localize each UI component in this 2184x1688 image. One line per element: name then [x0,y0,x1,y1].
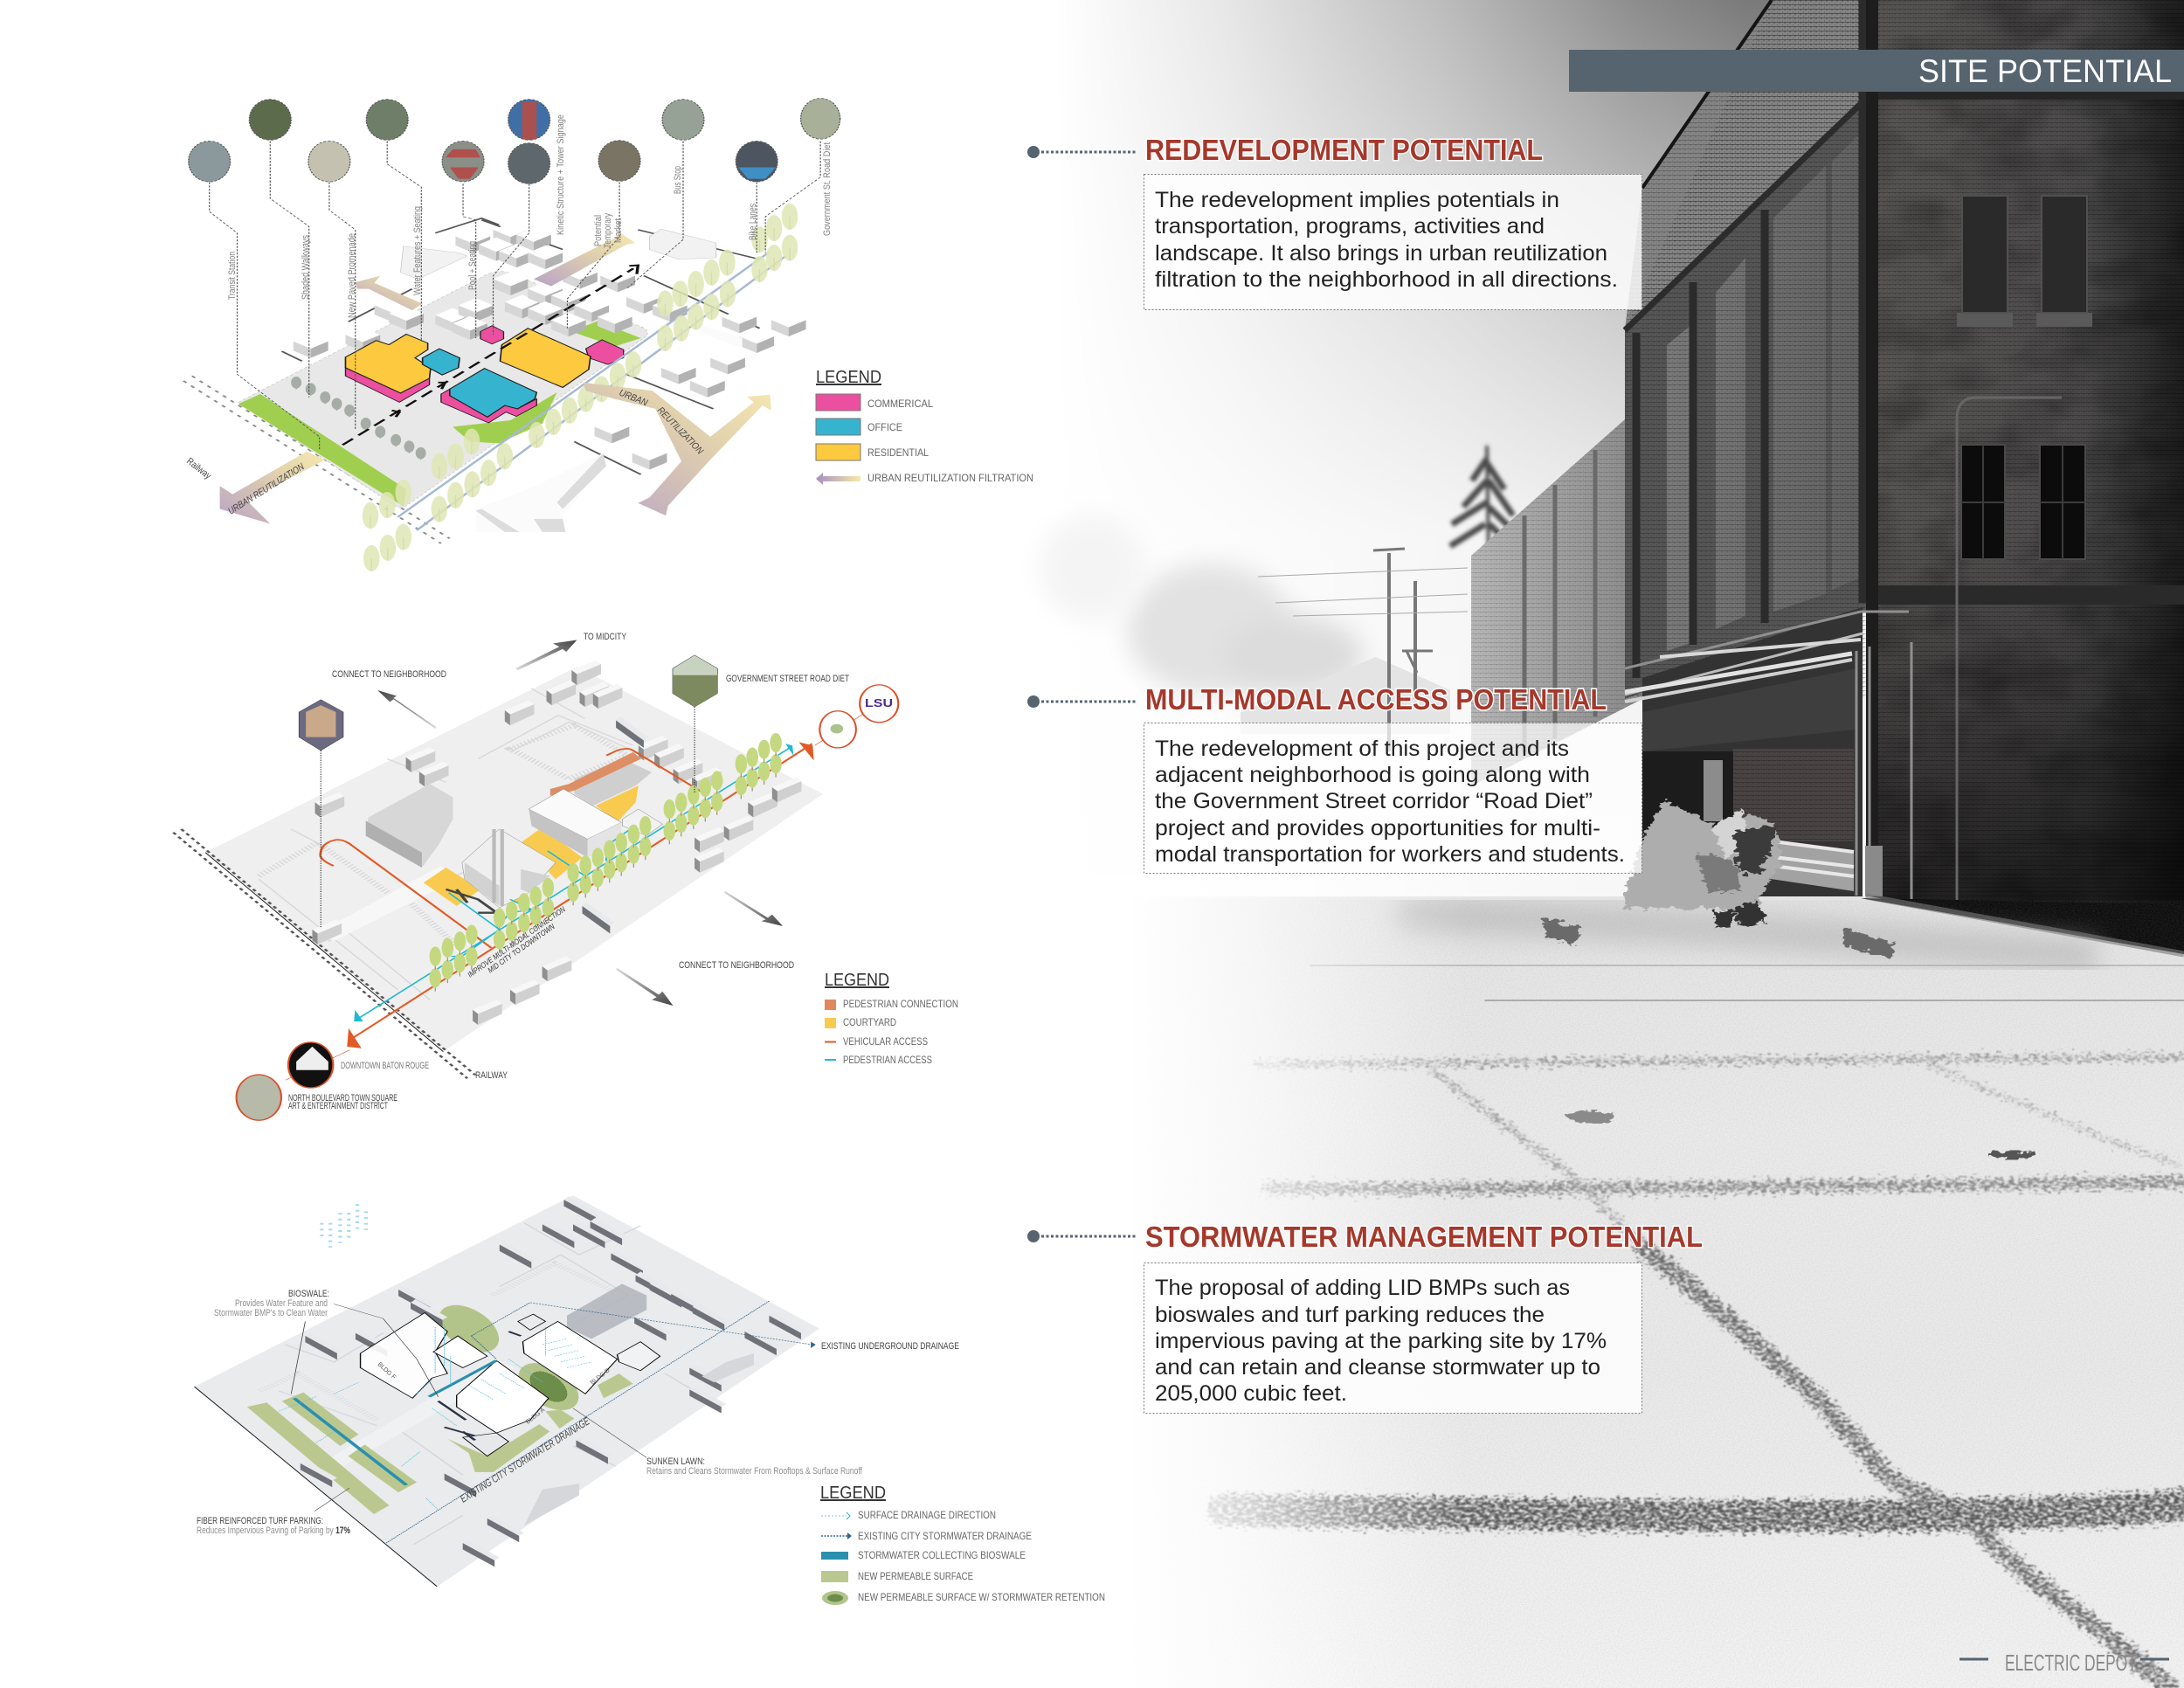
street trees [430,733,782,992]
retention lawns [427,1301,591,1414]
legend 2: PEDESTRIAN ACCESS [843,1054,932,1066]
diagram labels: Stormwater BMP's to Clean Water [214,1308,328,1318]
connector dot [1027,695,1137,708]
leaders [321,707,695,928]
text box [1144,723,1642,874]
diagram labels: BIOSWALE: [288,1289,329,1299]
text box: the Government Street corridor “Road Diet” [1155,789,1593,813]
street trees [363,204,798,571]
section: multi-modal access potential [1027,683,1642,874]
legend 1: LEGEND [816,368,881,387]
diagram labels: GOVERNMENT STREET ROAD DIET [726,674,849,684]
rubble pile [1542,799,1896,959]
neighbourhood direction arrows [377,640,783,1006]
urban reutilization arrows [220,233,771,523]
text box [1144,175,1642,309]
existing grey volumes [366,759,652,868]
legend 3: NEW PERMEABLE SURFACE [858,1570,973,1582]
diagram labels: New Paved Promenade [347,233,357,318]
section: redevelopment potential [1027,134,1642,309]
hexagon photos [299,655,717,751]
railway [173,829,475,1078]
white fade over ground [978,874,1468,1688]
title banner [1569,50,2184,92]
diagram labels: Government St. Road Diet [822,142,833,236]
legend 3: SURFACE DRAINAGE DIRECTION [858,1509,996,1521]
legend 1 [816,368,1033,485]
heading: STORMWATER MANAGEMENT POTENTIAL [1145,1221,1703,1253]
diagram labels: EXISTING CITY STORMWATER DRAINAGE [458,1415,592,1505]
pine tree [1450,446,1520,550]
connector dot [1027,1230,1137,1242]
rainfall dots [321,1204,366,1248]
text box: The proposal of adding LID BMPs such as [1155,1276,1570,1300]
lower adjacent building [1471,411,1642,786]
smokestack building [446,829,556,913]
upper windows [1957,196,2092,327]
site drawing [194,1195,819,1587]
diagram 1: redevelopment axonometric [183,99,1033,571]
vehicular access route [321,744,812,1038]
cross road and parking [259,688,644,1000]
text box: bioswales and turf parking reduces the [1155,1303,1545,1327]
title: SITE POTENTIAL [1918,53,2172,89]
section: stormwater management potential [1027,1221,1703,1414]
text box: 205,000 cubic feet. [1155,1381,1347,1406]
diagram labels: Railway [184,456,213,481]
diagram labels: BLDG F [377,1361,397,1380]
diagram labels: FIBER REINFORCED TURF PARKING: [197,1516,323,1526]
context blocks [301,1196,806,1567]
diagram labels: Pool + Seating [467,241,478,290]
site plate [238,272,647,508]
precedent photo circles [189,99,840,183]
diagram labels [184,114,833,517]
diagram 2: multi-modal access axonometric [173,632,958,1120]
diagram labels: Temporary [603,213,613,248]
legend 2: LEGEND [825,971,889,990]
site plate [194,1195,819,1587]
diagram labels: Market [613,218,624,243]
courtyards [424,785,639,906]
diagram labels: Potential [593,215,604,246]
diagram labels: REUTILIZATION [655,405,705,456]
bioswales [294,1360,496,1485]
text box: transportation, programs, activities and [1155,214,1545,239]
legend 3 [820,1484,1105,1605]
diagram labels: MID CITY TO DOWNTOWN [486,922,556,975]
context blocks [312,661,801,1025]
text box: and can retain and cleanse stormwater up to [1155,1355,1600,1380]
site drawing [183,99,840,571]
legend 1: OFFICE [867,421,902,433]
heading: REDEVELOPMENT POTENTIAL [1145,134,1543,166]
diagram labels: Bus Stop [673,166,683,194]
diagram labels: DOWNTOWN BATON ROUGE [341,1061,429,1071]
diagram labels: NORTH BOULEVARD TOWN SQUARE [288,1093,397,1103]
text box: The redevelopment implies potentials in [1155,188,1559,212]
site plate [205,667,823,1052]
text box: The redevelopment of this project and its [1155,737,1569,761]
heading: MULTI-MODAL ACCESS POTENTIAL [1145,683,1607,716]
diagram labels: LSU [865,696,893,709]
city stormwater drainage [386,1301,812,1543]
diagram labels: Transit Station [227,252,238,300]
ground [1005,896,2184,1688]
text box: landscape. It also brings in urban reutilization [1155,241,1607,266]
pedestrian connection [550,752,641,796]
background photo: abandoned electric depot [978,0,2184,1688]
diagram labels: CONNECT TO NEIGHBORHOOD [679,960,794,971]
route arrowheads [347,742,814,1048]
text box [1144,1263,1642,1414]
diagram labels: Water Features + Seating [412,206,423,295]
residential buildings (yellow) [345,329,591,393]
green spaces [238,321,641,507]
diagram labels: RAILWAY [475,1070,508,1081]
context blocks [282,218,806,532]
legend 2: PEDESTRIAN CONNECTION [843,998,958,1010]
sky [978,0,2184,926]
site drawing [173,640,898,1120]
diagram labels [197,1289,959,1536]
diagram labels: Bike Lanes [748,204,758,240]
diagram labels: TO MIDCITY [584,632,627,642]
text box: adjacent neighborhood is going along with [1155,763,1590,787]
ground floor, pipes and loading bay [1625,607,1911,900]
main brick building right face [1866,0,2184,957]
diagram labels: BLDG D [590,1367,612,1387]
road and parking lines [260,1223,714,1545]
commercial buildings (pink) [345,326,624,423]
text box: impervious paving at the parking site by 17% [1155,1329,1607,1353]
main axis dashed arrow [342,266,638,445]
pedestrian access routes [356,747,791,1020]
surface drainage arrows [279,1325,591,1510]
legend 1: RESIDENTIAL [867,446,929,459]
diagram labels: URBAN [618,388,649,409]
legend 2 [825,971,958,1066]
legend 2: VEHICULAR ACCESS [843,1035,928,1048]
faded trees and house [1040,515,1468,751]
legend 3: STORMWATER COLLECTING BIOSWALE [858,1549,1026,1561]
diagram labels: SUNKEN LAWN: [646,1456,705,1467]
legend 1: COMMERICAL [867,398,933,410]
legend 3: LEGEND [820,1484,886,1503]
diagram labels: ART & ENTERTAINMENT DISTRICT [288,1101,388,1111]
text box: filtration to the neighborhood in all directions. [1155,267,1618,292]
diagram labels: CONNECT TO NEIGHBORHOOD [332,669,446,680]
pavement cracks with grass [1223,965,2184,1688]
diagram 3: stormwater axonometric [194,1195,1105,1605]
destination circles [237,685,898,1120]
railway [183,376,450,543]
diagram labels: URBAN REUTILIZATION [226,461,306,517]
text box: project and provides opportunities for multi- [1155,816,1600,841]
new permeable surfaces [247,1373,633,1514]
lower windows [1961,445,2085,559]
diagram labels: Provides Water Feature and [235,1298,328,1309]
legend 1: URBAN REUTILIZATION FILTRATION [867,472,1033,484]
white outlined buildings [361,1312,660,1456]
leader lines [210,141,820,450]
diagram labels [288,632,893,1111]
legend 3: NEW PERMEABLE SURFACE W/ STORMWATER RETENTION [858,1591,1105,1603]
diagram labels: Reduces Impervious Paving of Parking by 17% [197,1525,350,1536]
diagram labels: EXISTING UNDERGROUND DRAINAGE [821,1341,959,1352]
government street [397,253,785,530]
main building [529,789,662,858]
plaza trees [291,377,426,460]
office buildings (cyan) [423,349,536,417]
leader lines [291,1304,646,1512]
diagram labels: BLDG A [525,1407,546,1426]
legend 2: COURTYARD [843,1016,896,1028]
connector dot [1027,146,1137,158]
diagram labels: Retains and Cleans Stormwater From Rooftops & Surface Runoff [646,1466,863,1477]
text box: modal transportation for workers and students. [1155,842,1625,867]
main brick building left face [1625,0,1866,699]
diagram labels: Shaded Walkways [301,235,311,300]
diagram labels: Kinetic Structure + Tower Signage [556,114,566,235]
diagram labels: IMPROVE MULTI-MODAL CONNECTION [466,904,567,979]
legend 3: EXISTING CITY STORMWATER DRAINAGE [858,1530,1032,1542]
